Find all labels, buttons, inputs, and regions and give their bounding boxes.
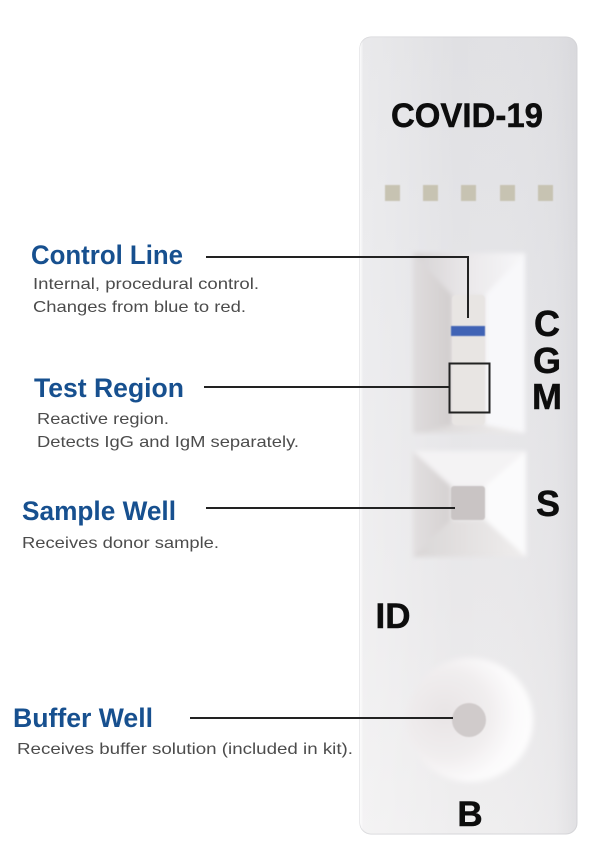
sample well	[413, 451, 526, 557]
cassette letter M: M	[532, 376, 562, 417]
cassette title: COVID-19	[391, 97, 543, 135]
description: control line: Internal, procedural control.	[33, 276, 259, 293]
leader: control line	[206, 257, 468, 318]
buffer pad	[452, 703, 486, 737]
indicator squares	[385, 185, 553, 201]
test strip	[452, 295, 485, 425]
buffer well	[407, 658, 533, 782]
description: sample well: Receives donor sample.	[22, 535, 219, 552]
leader and box: test region	[204, 364, 490, 412]
heading: sample well: Sample Well	[22, 496, 176, 526]
sample pad	[451, 486, 485, 520]
blue control band	[451, 326, 485, 336]
leader: buffer well	[190, 717, 453, 719]
description: test region: Reactive region.	[37, 411, 169, 428]
cassette letter G: G	[533, 340, 561, 381]
heading: buffer well: Buffer Well	[13, 703, 153, 733]
cassette letter C: C	[534, 303, 560, 344]
heading: test region: Test Region	[34, 373, 184, 403]
result window	[413, 253, 525, 433]
description: test region: Detects IgG and IgM separately.	[37, 434, 299, 451]
leader: sample well	[206, 507, 455, 509]
label: test region	[34, 373, 299, 451]
label: sample well	[22, 496, 219, 552]
heading: control line: Control Line	[31, 240, 183, 270]
cassette letter B: B	[457, 795, 483, 834]
label: buffer well	[13, 703, 353, 758]
description: control line: Changes from blue to red.	[33, 299, 246, 316]
cassette letter S: S	[536, 483, 560, 524]
test cassette	[360, 37, 577, 834]
label: control line	[31, 240, 259, 316]
description: buffer well: Receives buffer solution (included in kit).	[17, 741, 353, 758]
cassette label ID: ID	[376, 597, 410, 636]
